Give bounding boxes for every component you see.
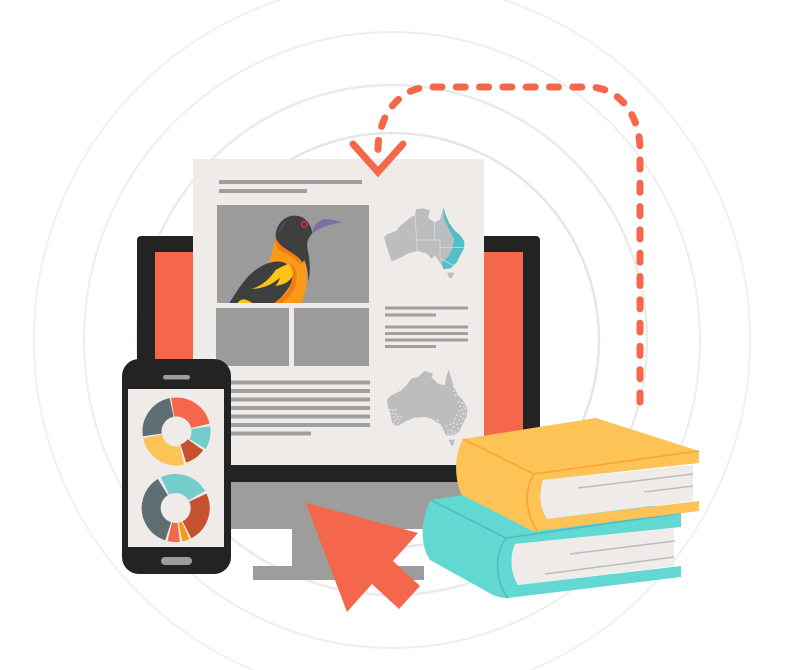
teal spine	[423, 500, 508, 598]
yellow book	[456, 418, 699, 531]
map: Australia with dot distribution	[387, 370, 467, 446]
yellow front cover	[527, 451, 699, 531]
yellow page lines	[578, 474, 693, 492]
monitor	[137, 236, 540, 580]
bird head	[276, 216, 312, 282]
phone home button	[161, 557, 192, 565]
bird breast shading	[275, 263, 297, 303]
state borders	[415, 215, 464, 266]
teal cover top	[431, 480, 681, 538]
dashed curved arrow	[353, 87, 640, 402]
document page	[193, 159, 484, 465]
phone speaker	[163, 375, 190, 380]
arrow head chevron	[353, 144, 403, 172]
distribution dots	[389, 386, 466, 435]
teal front cover	[498, 513, 681, 598]
bird body	[269, 235, 307, 303]
yellow cover top	[463, 418, 699, 474]
yellow pages	[540, 465, 693, 519]
monitor chin	[137, 482, 540, 529]
cursor arrow	[306, 503, 420, 612]
teal pages	[512, 528, 674, 585]
donut chart 2	[143, 475, 208, 541]
photo thumbnails	[216, 308, 369, 366]
highlighted east coast	[442, 207, 464, 269]
map: Australia with east coast highlighted	[384, 207, 464, 279]
Tasmania	[449, 440, 455, 446]
phone	[122, 359, 231, 574]
bird photo	[217, 205, 369, 303]
body text lines	[231, 380, 370, 436]
side text lines	[385, 306, 468, 348]
bird eye	[300, 220, 308, 228]
monitor frame	[137, 236, 540, 482]
bird wing	[229, 262, 292, 303]
yellow edge lines	[463, 439, 699, 531]
Tasmania	[447, 273, 454, 279]
bird wing bar	[251, 264, 293, 289]
yellow spine	[456, 439, 537, 531]
teal book	[423, 480, 681, 598]
donut chart 1	[144, 399, 209, 464]
teal edge lines	[431, 500, 681, 598]
teal page lines	[545, 541, 675, 574]
page heading lines	[219, 180, 362, 193]
bird lower yellow patch	[238, 299, 252, 303]
phone screen	[128, 389, 224, 547]
bird neck shading	[275, 237, 301, 265]
monitor screen	[155, 252, 523, 465]
bird	[229, 216, 342, 303]
bird beak	[312, 219, 342, 233]
bird head highlight	[278, 219, 288, 234]
monitor stand	[253, 525, 424, 580]
